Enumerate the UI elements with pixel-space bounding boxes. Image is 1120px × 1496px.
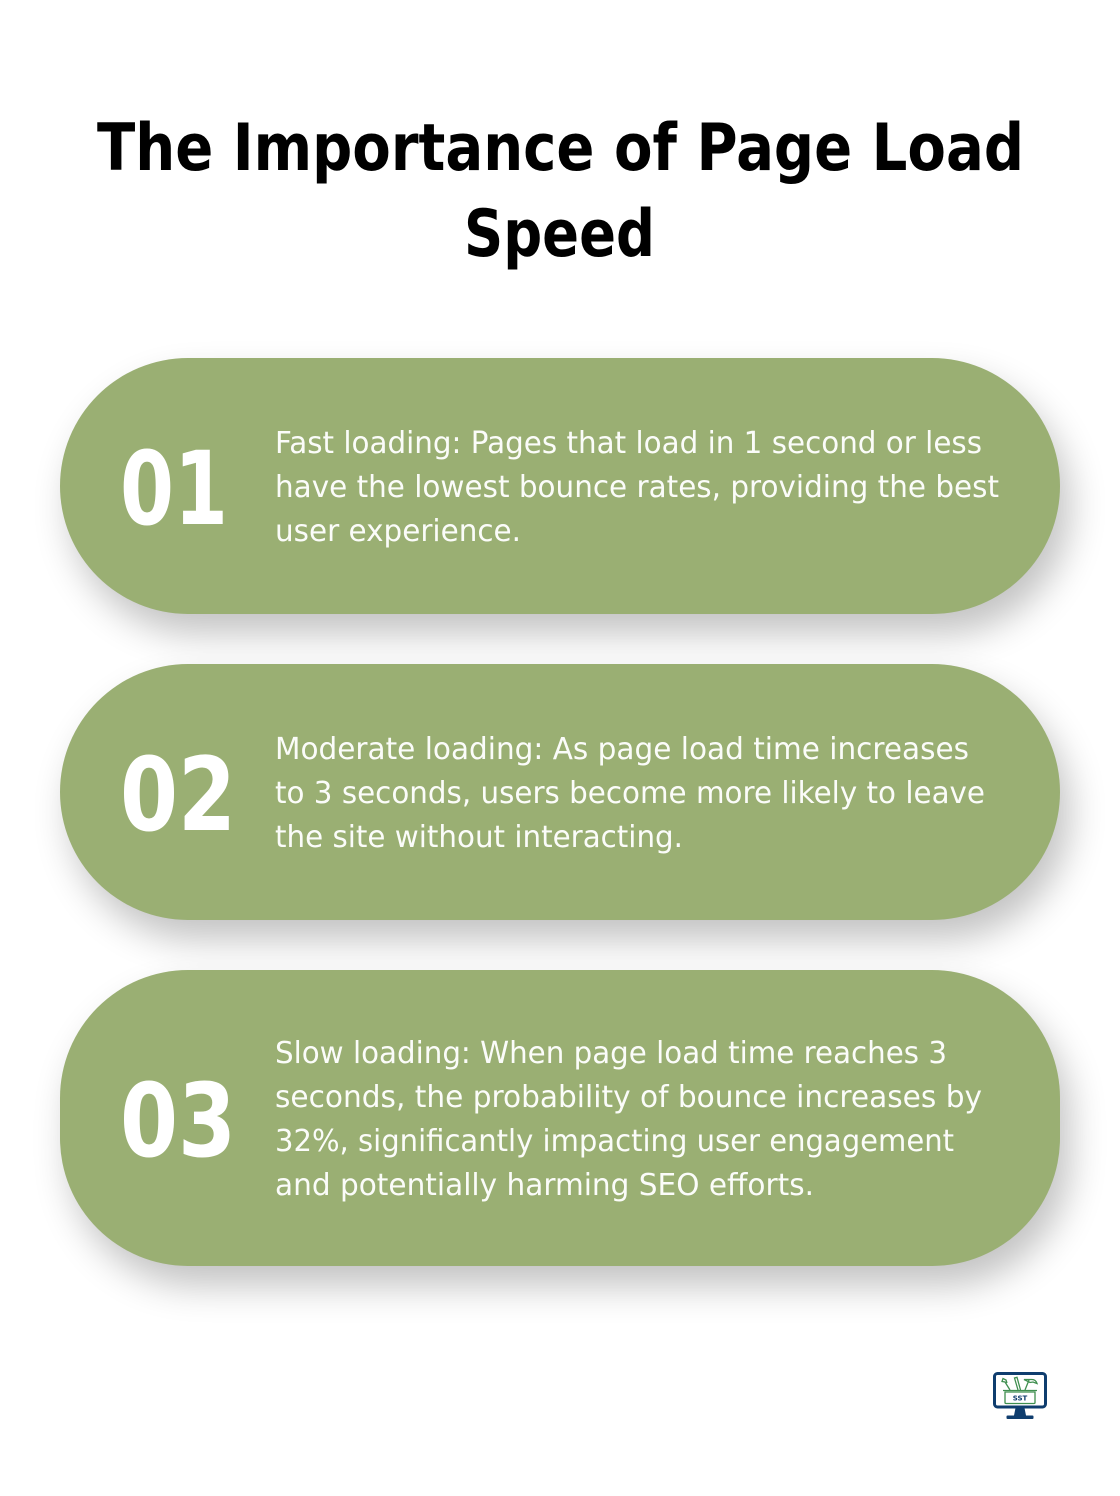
panel: step 01 fast loading	[60, 358, 1060, 614]
step 03 description: Slow loading: When page load time reaches 3	[275, 1036, 947, 1071]
step 03 description: seconds, the probability of bounce increases by	[275, 1080, 982, 1115]
step 02 description: the site without interacting.	[275, 820, 683, 855]
step 02 description: to 3 seconds, users become more likely to leave	[275, 776, 985, 811]
step 01 description: user experience.	[275, 514, 521, 549]
step 02 description	[275, 732, 985, 855]
icon: monitor with toolbox logo	[993, 1372, 1047, 1419]
step 02 description: Moderate loading: As page load time increases	[275, 732, 969, 767]
title: Speed	[464, 197, 655, 272]
title	[97, 111, 1024, 272]
icon: monitor with toolbox logo: SST	[1013, 1394, 1027, 1402]
panel: step 03 slow loading	[60, 970, 1060, 1266]
step number 02: 02	[120, 736, 236, 855]
step 03 description: and potentially harming SEO efforts.	[275, 1168, 814, 1203]
step 01 description	[275, 426, 999, 549]
step number 01: 01	[120, 430, 228, 549]
panel: step 02 moderate loading	[60, 664, 1060, 920]
step 03 description	[275, 1036, 982, 1203]
step 03 description: 32%, significantly impacting user engagement	[275, 1124, 954, 1159]
step 01 description: have the lowest bounce rates, providing the best	[275, 470, 999, 505]
step 01 description: Fast loading: Pages that load in 1 second or less	[275, 426, 982, 461]
step number 03: 03	[120, 1062, 236, 1181]
